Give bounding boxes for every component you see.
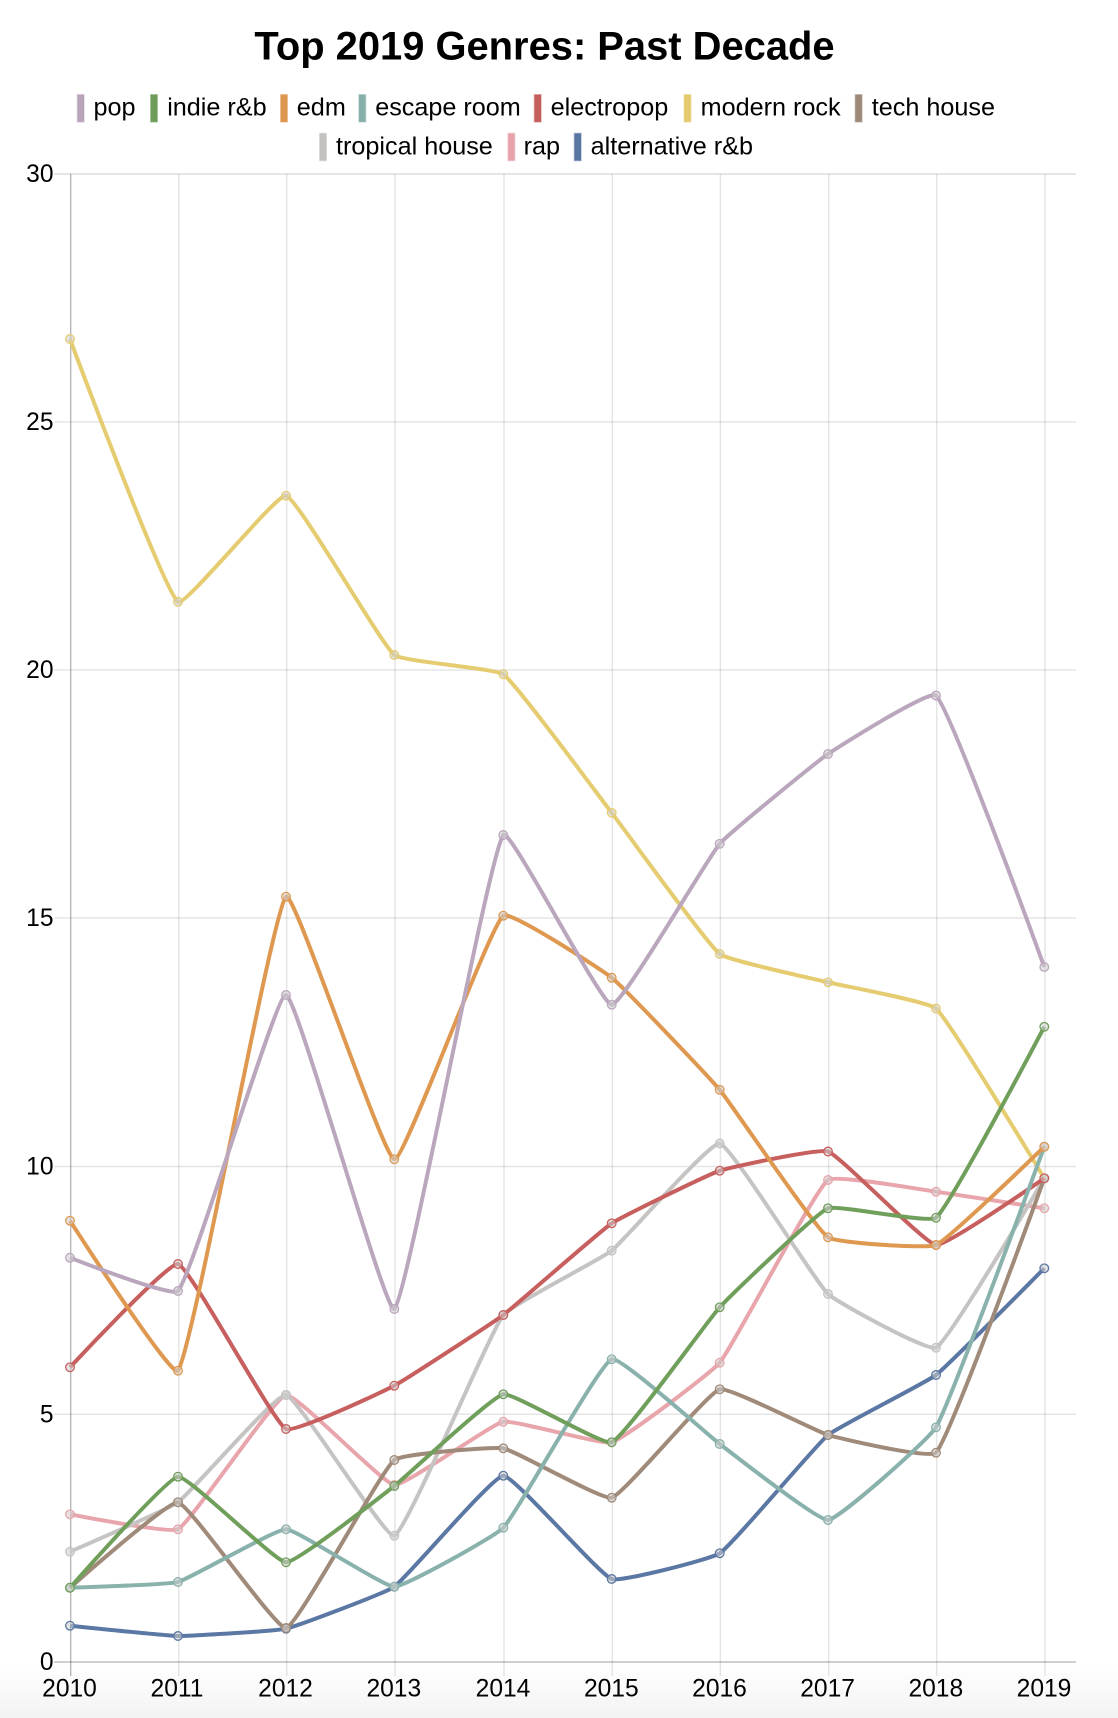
x axis labels: 2019	[1017, 1676, 1071, 1702]
y axis labels: 15	[26, 905, 54, 932]
series: pop	[66, 691, 1049, 1313]
legend item: alternative r&b: alternative r&b	[591, 132, 753, 160]
legend item: electropop: electropop	[551, 94, 668, 122]
x axis labels: 2017	[800, 1676, 855, 1702]
series: tropical house	[66, 1139, 1049, 1556]
series: indie r&b	[66, 1023, 1049, 1592]
series: alternative r&b	[66, 1264, 1049, 1640]
x axis labels: 2010	[42, 1676, 97, 1702]
y axis labels: 20	[26, 657, 54, 684]
legend item: rap: rap	[524, 132, 560, 160]
x axis labels: 2015	[584, 1676, 639, 1702]
legend item: pop: pop	[94, 94, 136, 122]
y axis labels: 25	[26, 409, 54, 436]
y axis labels: 10	[26, 1153, 54, 1180]
x axis labels: 2018	[908, 1676, 963, 1702]
series: rap	[66, 1176, 1049, 1534]
legend	[77, 94, 995, 161]
series: modern rock	[66, 335, 1049, 1183]
title: Top 2019 Genres: Past Decade	[254, 24, 835, 68]
series: escape room	[66, 1142, 1049, 1592]
x axis labels	[42, 1676, 1071, 1702]
y axis labels: 5	[40, 1401, 54, 1428]
legend item: indie r&b: indie r&b	[167, 94, 267, 122]
series: edm	[66, 892, 1049, 1375]
x axis labels: 2012	[258, 1676, 313, 1702]
legend item: rap	[508, 132, 560, 161]
x axis labels: 2014	[476, 1676, 530, 1702]
legend item: tropical house: tropical house	[336, 132, 493, 160]
series: tech house	[66, 1174, 1049, 1632]
x axis labels: 2011	[151, 1676, 203, 1702]
series: electropop	[66, 1147, 1049, 1433]
legend item: tech house: tech house	[872, 94, 995, 122]
y axis labels: 0	[40, 1649, 54, 1676]
y axis labels: 30	[26, 161, 54, 188]
legend item: escape room: escape room	[375, 94, 521, 122]
legend item: modern rock: modern rock	[701, 94, 841, 122]
x axis labels: 2013	[366, 1676, 421, 1702]
y axis labels	[26, 161, 54, 1676]
legend item: edm: edm	[297, 94, 346, 122]
x axis labels: 2016	[692, 1676, 747, 1702]
